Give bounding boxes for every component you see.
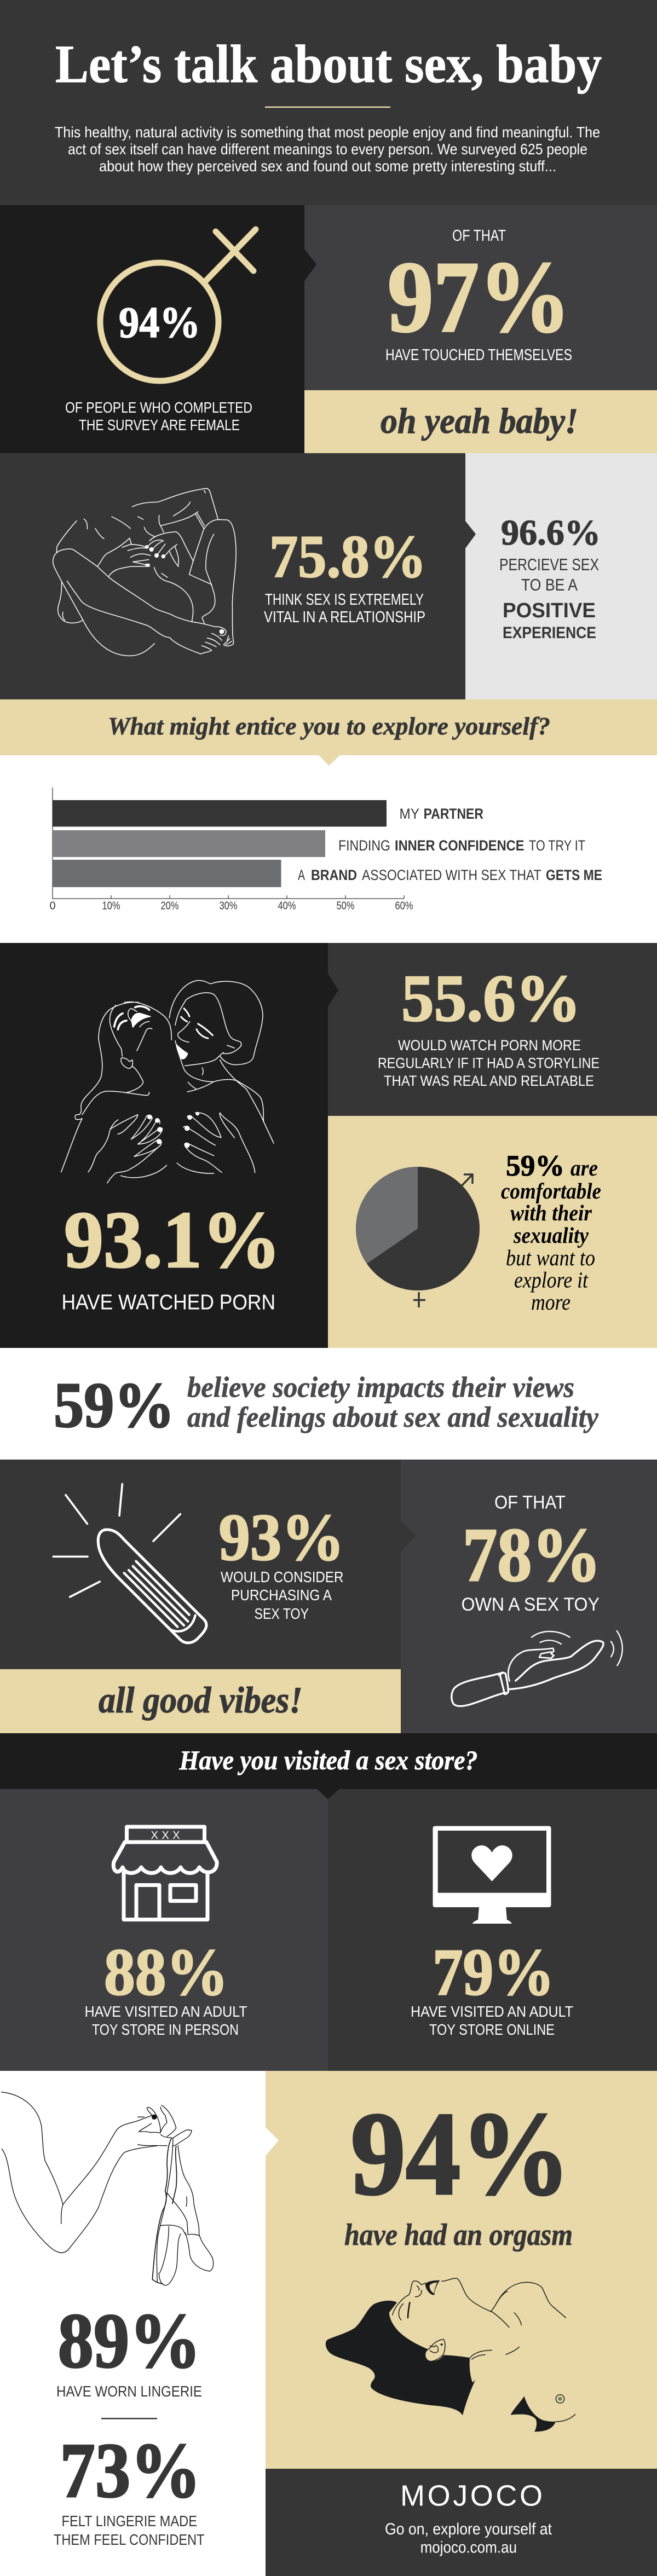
text: call to action: Go on, explore yourself at <box>385 2520 552 2538</box>
intro text <box>55 124 600 175</box>
panel: 59% comfortable <box>328 1116 657 1348</box>
icon: rabbit vibrator <box>452 1631 623 1706</box>
pie chart <box>356 1167 480 1307</box>
panel: 93.1% watched porn <box>0 943 328 1348</box>
caption: online <box>411 2003 573 2038</box>
text: call to action <box>385 2520 552 2557</box>
caption: have watched porn: HAVE WATCHED PORN <box>61 1290 275 1315</box>
banner: what might entice you: What might entice you to explore yourself? <box>108 712 550 740</box>
banner: all good vibes: all good vibes! <box>99 1679 302 1721</box>
stat: 75.8%: 75.8% <box>269 523 427 590</box>
text: comfortable with sexuality: explore it <box>514 1267 589 1293</box>
banner: what might entice you <box>0 699 657 766</box>
text: of that: OF THAT <box>452 227 506 245</box>
bar: brand <box>53 860 602 887</box>
bar: inner confidence <box>53 830 585 857</box>
title: Let’s talk about sex, baby <box>55 34 602 94</box>
caption: positive experience: POSITIVE <box>503 599 596 622</box>
chart axis labels: 0 <box>49 900 56 912</box>
illustration: arm holding lingerie <box>2 2092 214 2285</box>
bar chart <box>49 788 602 912</box>
bar: brand: A <box>298 867 305 883</box>
stat: 93%: 93% <box>219 1501 344 1574</box>
callout: 59% society: 59% <box>54 1369 175 1441</box>
stat: 96.6%: 96.6% <box>501 513 601 553</box>
caption: vital in a relationship: THINK SEX IS EXTREMELY <box>265 591 424 609</box>
caption: have touched themselves: HAVE TOUCHED THEMSELVES <box>385 346 572 364</box>
caption: in person: TOY STORE IN PERSON <box>92 2021 239 2038</box>
panel: 96.6% positive <box>465 453 657 699</box>
caption: own a sex toy: OWN A SEX TOY <box>461 1594 600 1615</box>
panel: footer mojoco <box>266 2469 657 2576</box>
stat: 79%: 79% <box>433 1935 554 2010</box>
banner: oh yeah baby: oh yeah baby! <box>381 401 578 441</box>
panel: 55.6% storyline <box>328 943 657 1116</box>
panel: 79% online <box>317 1789 657 2071</box>
bar: brand: ASSOCIATED WITH SEX THAT <box>362 867 541 883</box>
icon: monitor with heart <box>433 1826 551 1924</box>
callout: 59% society: and feelings about sex and sexuality <box>187 1402 598 1433</box>
icon: vibrator <box>53 1484 206 1643</box>
bar: inner confidence: TO TRY IT <box>529 837 585 854</box>
chart axis labels <box>49 900 413 912</box>
caption: people who completed: OF PEOPLE WHO COMPLETED <box>65 399 252 416</box>
bar: inner confidence: INNER CONFIDENCE <box>395 837 525 854</box>
chart axis labels: 40% <box>278 900 296 912</box>
caption: consider purchasing: SEX TOY <box>254 1605 309 1622</box>
intro text: This healthy, natural activity is something that most people enjoy and find meaningful. The <box>55 124 600 141</box>
caption: felt confident <box>54 2513 205 2548</box>
banner: all good vibes <box>0 1669 401 1734</box>
banner: have you visited a sex store <box>0 1733 657 1789</box>
caption: positive experience: EXPERIENCE <box>503 624 596 642</box>
stat: 94%: 94% <box>119 299 200 347</box>
caption: storyline: WOULD WATCH PORN MORE <box>398 1037 581 1053</box>
logo: MOJOCO: MOJOCO <box>400 2480 543 2513</box>
icon: adult store <box>113 1827 217 1920</box>
icon: female symbol <box>100 229 256 381</box>
panel: 78% own a sex toy <box>401 1460 657 1734</box>
text: of that: OF THAT <box>494 1492 566 1513</box>
text: comfortable with sexuality: with their <box>510 1200 592 1225</box>
caption: felt confident: FELT LINGERIE MADE <box>61 2513 197 2529</box>
panel: 93% sex toy <box>0 1460 401 1669</box>
banner: oh yeah baby <box>304 390 657 454</box>
panel: lingerie <box>0 2071 266 2576</box>
stat: 97%: 97% <box>388 241 570 354</box>
caption: storyline: THAT WAS REAL AND RELATABLE <box>384 1073 594 1089</box>
panel: 94% orgasm <box>266 2071 657 2469</box>
stat: 55.6%: 55.6% <box>401 962 581 1035</box>
chart axis labels: 60% <box>395 900 413 912</box>
intro text: act of sex itself can have different meanings to every person. We surveyed 625 people <box>68 141 587 158</box>
caption: positive experience: TO BE A <box>521 575 578 594</box>
caption: positive experience: PERCIEVE SEX <box>499 555 599 574</box>
panel: header <box>0 0 657 205</box>
text: comfortable with sexuality: are <box>570 1155 598 1180</box>
stat: 93.1%: 93.1% <box>64 1195 281 1285</box>
bar: my partner <box>53 800 483 826</box>
caption: in person <box>85 2003 247 2038</box>
chart axis labels: 50% <box>336 900 355 912</box>
caption: consider purchasing <box>221 1568 344 1622</box>
text: comfortable with sexuality: more <box>531 1289 570 1315</box>
callout: 59% society <box>54 1369 598 1441</box>
caption: people who completed <box>65 399 252 433</box>
caption: storyline: REGULARLY IF IT HAD A STORYLINE <box>378 1055 600 1071</box>
text: comfortable with sexuality: 59% <box>506 1149 564 1182</box>
panel: 88% in person <box>0 1789 328 2071</box>
chart axis labels: 20% <box>161 900 179 912</box>
text: call to action: mojoco.com.au <box>420 2539 517 2557</box>
caption: have had an orgasm: have had an orgasm <box>344 2218 573 2252</box>
caption: felt confident: THEM FEEL CONFIDENT <box>54 2531 205 2548</box>
bar: my partner: MY <box>400 806 419 822</box>
panel: 75.8% vital <box>0 453 465 699</box>
bar: brand: BRAND <box>311 867 357 883</box>
caption: people who completed: THE SURVEY ARE FEMALE <box>79 416 240 433</box>
text: comfortable with sexuality <box>501 1149 601 1315</box>
stat: 94%: 94% <box>350 2088 570 2220</box>
caption: positive experience <box>499 555 599 642</box>
caption: in person: HAVE VISITED AN ADULT <box>85 2003 247 2020</box>
banner: have you visited a sex store: Have you visited a sex store? <box>179 1745 477 1775</box>
text: comfortable with sexuality: sexuality <box>513 1223 589 1248</box>
caption: online: TOY STORE ONLINE <box>429 2021 555 2038</box>
chart axis labels: 30% <box>219 900 238 912</box>
bar: inner confidence: FINDING <box>338 837 390 854</box>
intro text: about how they perceived sex and found out some pretty interesting stuff... <box>99 158 556 175</box>
bar: my partner: PARTNER <box>424 806 483 822</box>
caption: vital in a relationship <box>264 591 425 626</box>
caption: consider purchasing: PURCHASING A <box>231 1587 332 1604</box>
illustration: couple line art <box>53 488 236 656</box>
text: comfortable with sexuality: comfortable <box>501 1178 601 1203</box>
caption: have worn lingerie: HAVE WORN LINGERIE <box>56 2383 202 2400</box>
stat: 73%: 73% <box>60 2427 201 2514</box>
callout: 59% society: believe society impacts their views <box>187 1371 574 1403</box>
caption: online: HAVE VISITED AN ADULT <box>411 2003 573 2020</box>
chart axis labels: 10% <box>102 900 120 912</box>
caption: vital in a relationship: VITAL IN A RELATIONSHIP <box>264 609 425 626</box>
bar: brand: GETS ME <box>546 867 602 883</box>
illustration: kissing couple line art <box>61 980 274 1183</box>
illustration: woman <box>326 2278 575 2432</box>
stat: 78%: 78% <box>463 1513 601 1597</box>
text: comfortable with sexuality: but want to <box>506 1245 595 1270</box>
caption: storyline <box>378 1037 600 1089</box>
icon: adult store: XXX <box>151 1830 180 1842</box>
stat: 89%: 89% <box>58 2297 201 2384</box>
stat: 88%: 88% <box>104 1935 228 2010</box>
panel: 97% touched themselves <box>304 205 657 390</box>
panel: 94% female <box>0 205 304 454</box>
caption: consider purchasing: WOULD CONSIDER <box>221 1568 344 1585</box>
